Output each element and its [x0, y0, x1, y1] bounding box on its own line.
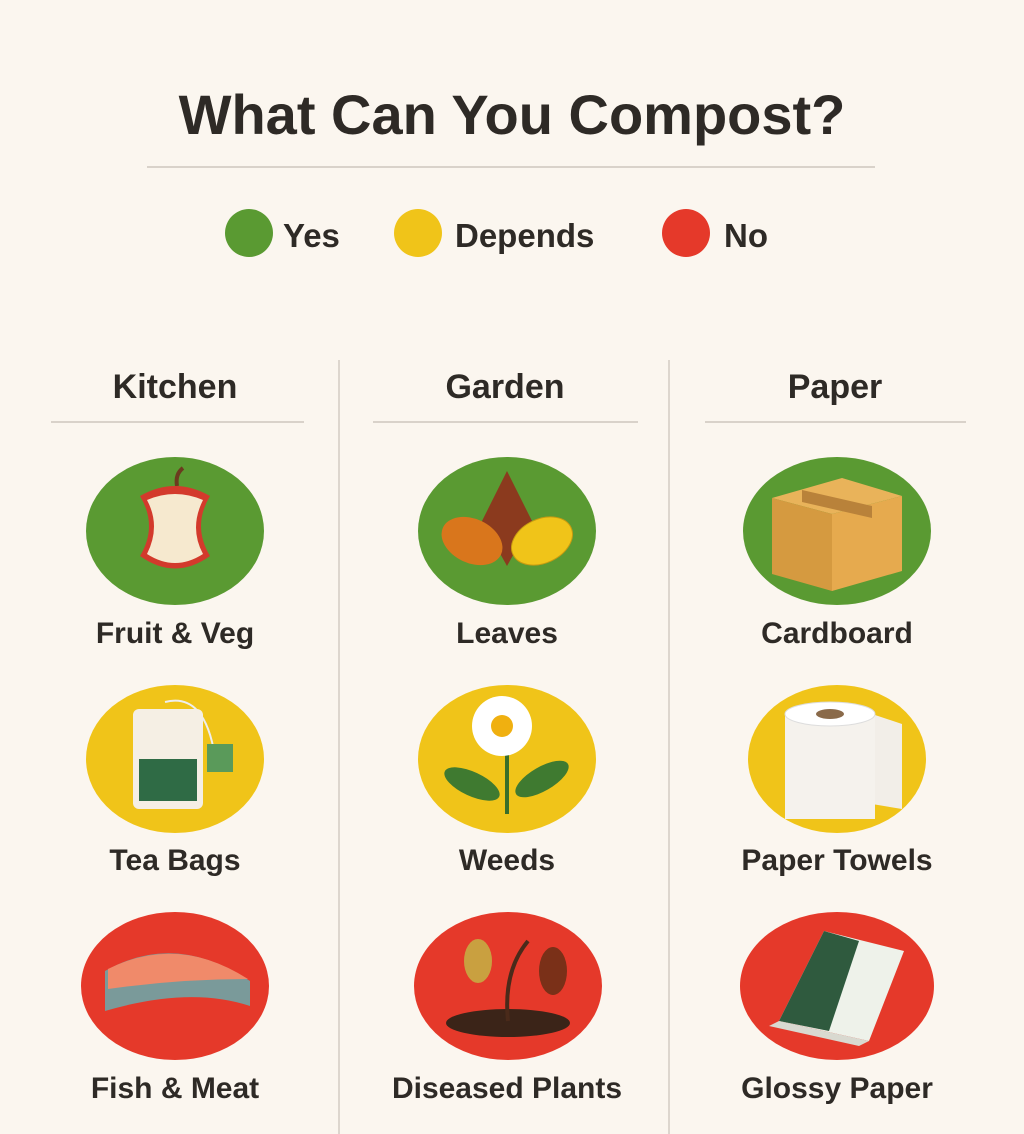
text: Fruit & Veg: [96, 617, 254, 650]
legend: yes: Yes: [283, 217, 340, 254]
heading: paper: Paper: [788, 368, 882, 406]
icon: paper towel roll (depends): [748, 685, 926, 833]
text: Tea Bags: [109, 844, 241, 877]
text: Glossy Paper: [741, 1072, 933, 1105]
icon: leaves (yes): [418, 457, 596, 605]
legend: no: No: [724, 217, 768, 254]
text: Paper Towels: [741, 844, 933, 877]
text: Fish & Meat: [91, 1072, 259, 1105]
icon: cardboard box (yes): [743, 457, 931, 605]
legend: no: [662, 209, 768, 257]
heading: garden: Garden: [445, 368, 565, 406]
text: Cardboard: [761, 617, 913, 650]
icon: glossy magazine (no): [740, 912, 934, 1060]
heading: kitchen: Kitchen: [113, 368, 237, 406]
text: Diseased Plants: [392, 1072, 622, 1105]
text: Weeds: [459, 844, 555, 877]
legend: depends: Depends: [455, 217, 594, 254]
icon: diseased plant (no): [414, 912, 602, 1060]
legend: depends: [394, 209, 594, 257]
icon: salmon steak (no): [81, 912, 269, 1060]
icon: dandelion (depends): [418, 685, 596, 833]
legend: yes: [225, 209, 340, 257]
icon: tea bag (depends): [86, 685, 264, 833]
icon: apple core (yes): [86, 457, 264, 605]
text: Leaves: [456, 617, 558, 650]
legend: [225, 209, 768, 257]
title: What Can You Compost?: [179, 83, 845, 146]
